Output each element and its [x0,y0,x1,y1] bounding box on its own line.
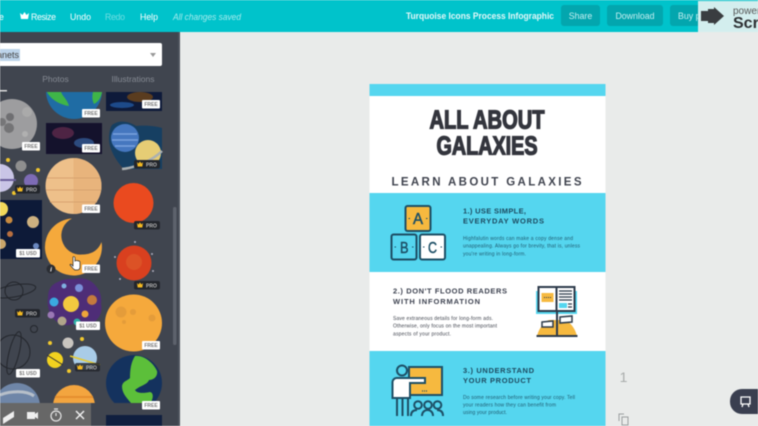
icon: info badge: i [50,266,52,274]
panel: step 1 [370,193,606,272]
pro badges: PRO [146,224,157,230]
button: download: Download [615,11,655,21]
menu: redo: Redo [105,12,125,22]
thumb: earth photo [0,382,40,404]
button: share: Share [569,11,592,21]
thumb: wooden planet [46,158,102,214]
step 1 heading: EVERYDAY WORDS [463,217,544,226]
step 3 body: your readers how they can benefit from [463,402,556,408]
step 2 body: aspects of your product. [393,331,451,337]
sidebar panel [0,32,180,426]
step 3 body [463,395,575,416]
step 3 heading [463,366,535,385]
save status: All changes saved [172,12,242,22]
watermark logo [698,1,758,32]
thumb: yellow and blue planets sticker [47,337,100,373]
title [430,106,545,160]
icon: pen [3,411,14,424]
icon: duplicate page [619,414,628,425]
pro badges: PRO [146,162,157,168]
recorder control bar [0,403,91,426]
subtitle: LEARN ABOUT GALAXIES [392,176,582,188]
scrollbar [173,207,176,345]
icon: info badge [46,264,56,274]
thumb: bottom dark photo [106,415,162,426]
button: buy: Buy p [678,11,701,21]
thumb: grey moon [0,99,37,149]
active tab underline [0,90,7,92]
menu: undo: Undo [70,12,91,22]
step 1 body [463,236,580,257]
thumb: nebula [46,123,102,154]
price badges: FREE [84,146,98,152]
step 1 body: unappealing. Always go for brevity, that is, unless [463,244,580,250]
price badges: $1 USD [79,324,97,330]
menu: resize: Resize [31,12,56,22]
price badges: FREE [84,111,98,117]
panel: step 2 [393,287,578,337]
thumb: orange cratered moon [105,294,162,352]
thumb: red planet [114,183,154,223]
icon: close [76,411,84,419]
step 1 heading: 1.) USE SIMPLE, [463,206,526,216]
pro badges: PRO [26,312,37,318]
icon: camera [27,412,38,419]
step 1 heading [463,206,544,226]
tab: illustrations: Illustrations [112,74,154,84]
price badges: FREE [144,343,158,349]
icon: ABC blocks: A [413,211,423,228]
price badges: $1 USD [19,371,37,377]
thumb: red planet with dots [114,241,154,280]
top toolbar [0,0,758,32]
icon: presenter at board [392,366,443,416]
thumb: dark night sky [106,92,162,111]
pro badges: PRO [26,188,37,194]
panel: step 3 [370,351,606,426]
step 2 body [393,316,498,337]
icon: ABC blocks: C [428,240,437,257]
price badges [16,100,160,410]
price badges: FREE [84,266,98,272]
thumb: orange crescent [45,218,102,275]
title: GALAXIES [436,132,538,160]
thumb: half earth [46,91,102,120]
step 2 heading: 2.) DON'T FLOOD READERS [393,287,507,296]
presentation widget [730,389,758,414]
price badges: FREE [144,403,158,409]
icon: hand cursor [70,257,80,270]
thumb: purple solar system sticker [48,278,102,326]
page number: 1 [620,369,628,385]
infographic poster [370,84,606,426]
icon: ABC blocks [392,206,445,260]
title: ALL ABOUT [430,106,545,134]
pro badges: PRO [146,284,157,290]
search dropdown [0,43,162,66]
step 2 body: Otherwise, only focus on the most important [393,324,498,330]
button: download [607,5,663,26]
thumb: jupiter [52,384,96,404]
icon: watermark arrow [701,7,724,25]
step 1 body: Highfalutin words can make a copy dense and [463,236,573,242]
step 2 heading [393,287,507,306]
top colour band [370,84,606,96]
thumb: outlined ringed planet [0,326,38,376]
icon: timer [51,409,61,421]
menu: help: Help [140,12,158,22]
thumb: neptune and saturn sticker [109,122,162,169]
step 3 body: Do some research before writing your copy. Tell [463,395,575,401]
button: buy [670,5,710,26]
pro badges: PRO [86,366,97,372]
price badges: FREE [84,206,98,212]
icon: presentation easel [741,397,750,407]
icon: ABC blocks: B [400,240,408,257]
price badges: FREE [24,144,38,150]
step 2 body: Save extraneous details for long-form ads. [393,316,493,322]
thumb: solar system photo [0,200,42,259]
icon: open book plant [536,287,578,336]
document title: Turquoise Icons Process Infographic [406,11,554,21]
thumb: dark earth [106,354,162,404]
price badges: $1 USD [19,251,37,257]
pro badges [15,160,160,372]
step 2 heading: WITH INFORMATION [393,297,480,306]
thumb: purple planets sticker [0,158,40,195]
button: share [561,5,600,26]
step 3 heading: YOUR PRODUCT [463,376,531,385]
thumbnail grid [0,91,164,404]
step 1 body: you're writing in long-form. [463,251,526,257]
icon: resize crown [20,12,29,19]
thumb: outlined saturn [0,281,37,301]
tab: photos: Photos [42,74,69,84]
step 3 heading: 3.) UNDERSTAND [463,366,535,375]
step 3 body: using your product. [463,410,507,416]
price badges: FREE [144,102,158,108]
